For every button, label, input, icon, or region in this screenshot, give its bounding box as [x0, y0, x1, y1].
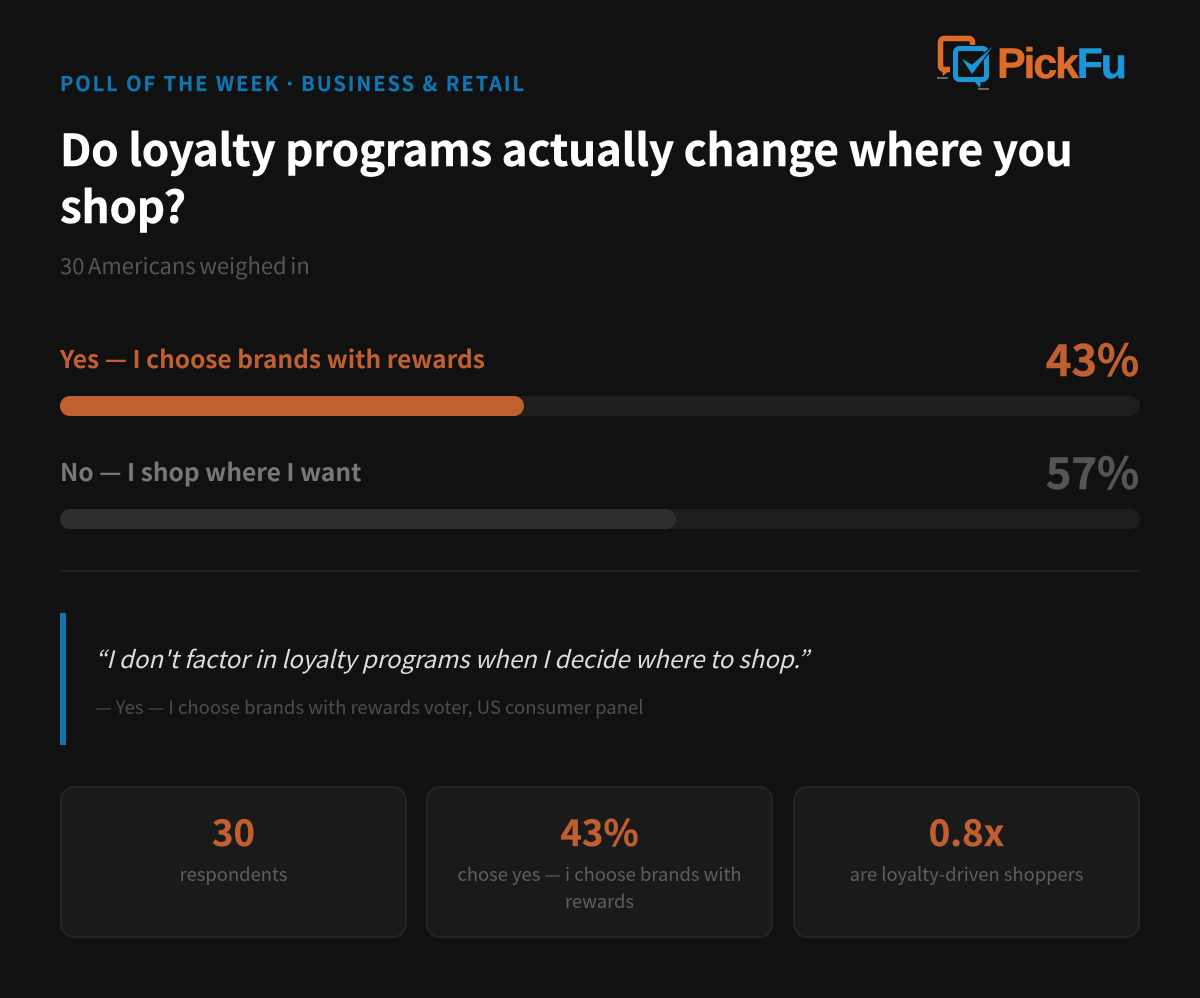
- quote text: “I don't factor in loyalty programs when I decide where to shop.”: [95, 640, 809, 675]
- yes bar: [60, 396, 1140, 416]
- eyebrow label: POLL OF THE WEEK · BUSINESS & RETAIL: [60, 68, 526, 97]
- stat value: 43%: [560, 804, 639, 857]
- option: yes: [60, 325, 1140, 416]
- yes label: Yes — I choose brands with rewards: [60, 341, 485, 376]
- stat card: chose yes: [426, 786, 773, 938]
- logo: PickFu: PickFu: [997, 40, 1125, 88]
- stat value: 30: [212, 804, 255, 857]
- quote accent bar: [60, 613, 66, 745]
- stat label: chose yes — i choose brands with rewards: [457, 861, 742, 914]
- stat card: loyalty-driven: [793, 786, 1140, 938]
- no label: No — I shop where I want: [60, 454, 361, 489]
- stat card: respondents: [60, 786, 407, 938]
- quote block: [60, 613, 812, 745]
- no bar: [60, 509, 1140, 529]
- stat label: are loyalty-driven shoppers: [850, 861, 1083, 887]
- title: Do loyalty programs actually change where you shop?: [60, 115, 1073, 236]
- logo: PickFu: [937, 36, 1125, 90]
- stat label: respondents: [180, 861, 287, 887]
- yes percentage: 43%: [1046, 325, 1139, 389]
- quote attribution: — Yes — I choose brands with rewards voter, US consumer panel: [95, 694, 644, 720]
- option: no: [60, 438, 1140, 529]
- no percentage: 57%: [1046, 438, 1139, 502]
- subtitle: 30 Americans weighed in: [60, 249, 310, 281]
- stat value: 0.8x: [929, 804, 1004, 857]
